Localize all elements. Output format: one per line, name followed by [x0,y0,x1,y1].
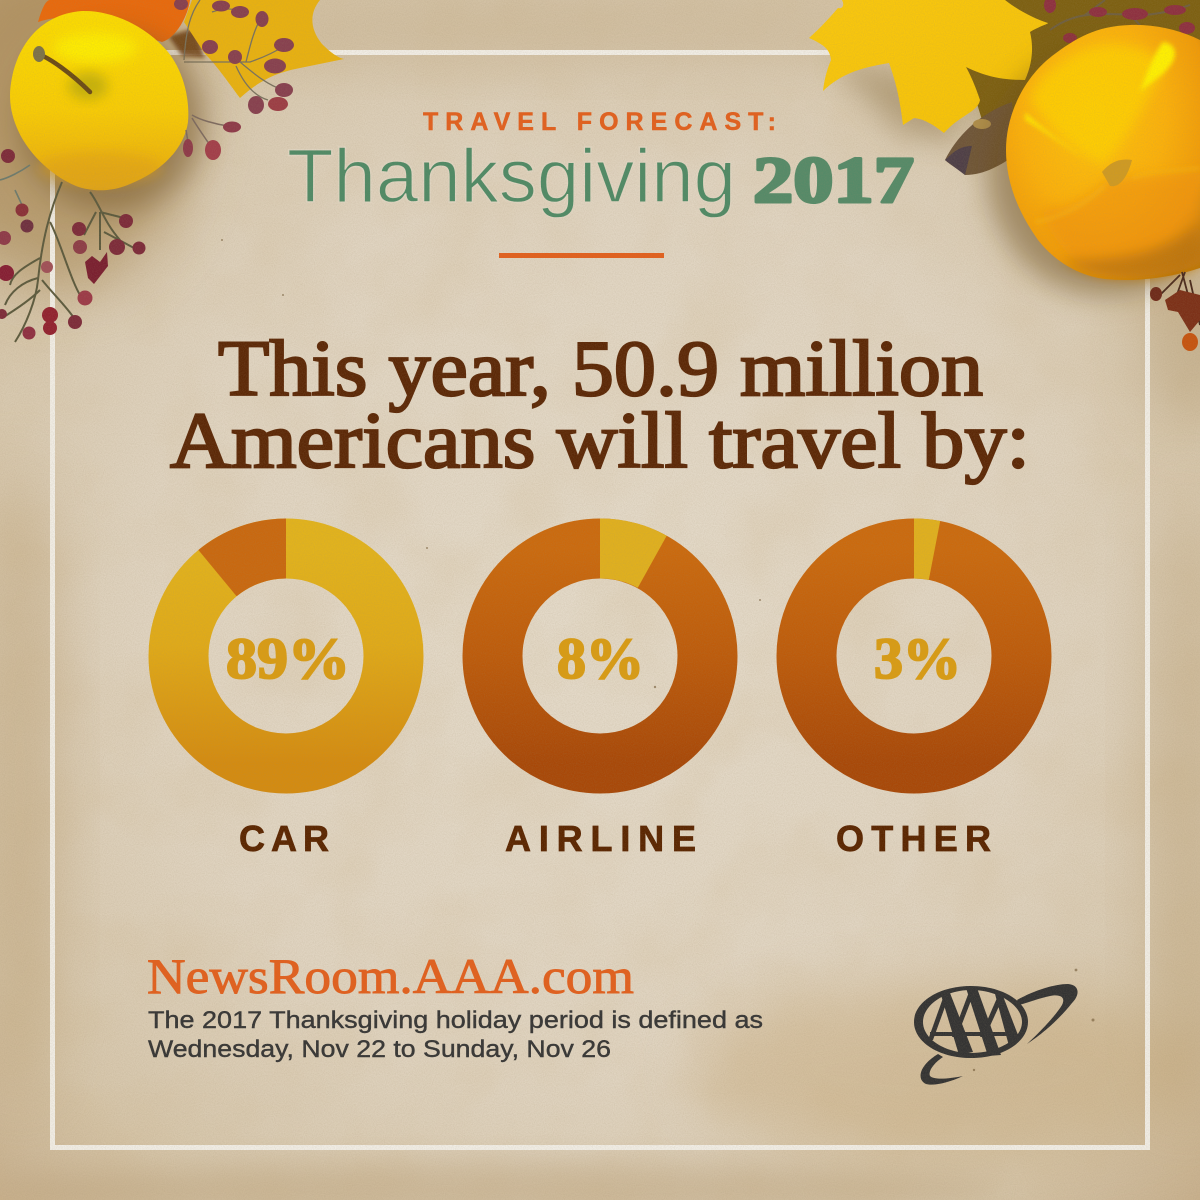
AAA logo [914,984,1078,1085]
pumpkin [1006,25,1200,280]
yellow maple leaf [809,0,1048,133]
berry sprig: top right [1044,0,1195,43]
title: Thanksgiving [287,134,736,219]
donut: 89% car [178,518,394,764]
footnote: Wednesday, Nov 22 to Sunday, Nov 26 [148,1036,611,1063]
label: OTHER [836,818,991,859]
website link: NewsRoom.AAA.com [147,948,634,1004]
main headline: Americans will travel by: [170,398,1030,485]
apple [10,11,188,190]
yellow maple leaf [184,0,344,98]
panel: airline donut [492,518,708,859]
label: CAR [239,818,329,859]
small headline: TRAVEL FORECAST: [423,108,776,136]
donut: 3% other [806,518,1022,764]
orange leaf [38,0,190,42]
berry sprig: upper [174,0,294,114]
dark patch behind leaves [168,28,205,58]
value: 3% [874,626,961,691]
value: 89% [226,626,350,691]
pumpkin shadow [987,48,1200,296]
maple leaf shadow [830,60,960,142]
donut: 8% airline [492,518,708,764]
main headline [170,326,1030,485]
decoration: top-right leaf, nut, pumpkin and berries [809,0,1200,351]
main headline: This year, 50.9 million [218,326,983,413]
panel: car donut [178,518,394,859]
shadow under apple [20,32,204,212]
orange rule [499,253,664,258]
title: 2017 [753,144,914,217]
olive patch behind leaf [966,0,1200,130]
value: 8% [557,626,644,691]
footnote [148,1007,763,1063]
berry sprig: lower left [0,149,146,342]
berry sprig: lower right [1150,272,1200,351]
berry sprig: middle [183,115,241,160]
label: AIRLINE [505,818,696,859]
nut [945,102,1016,175]
decoration: top-left apple, leaves and berries [0,0,344,342]
footnote: The 2017 Thanksgiving holiday period is defined as [148,1007,763,1034]
panel: other donut [806,518,1022,859]
